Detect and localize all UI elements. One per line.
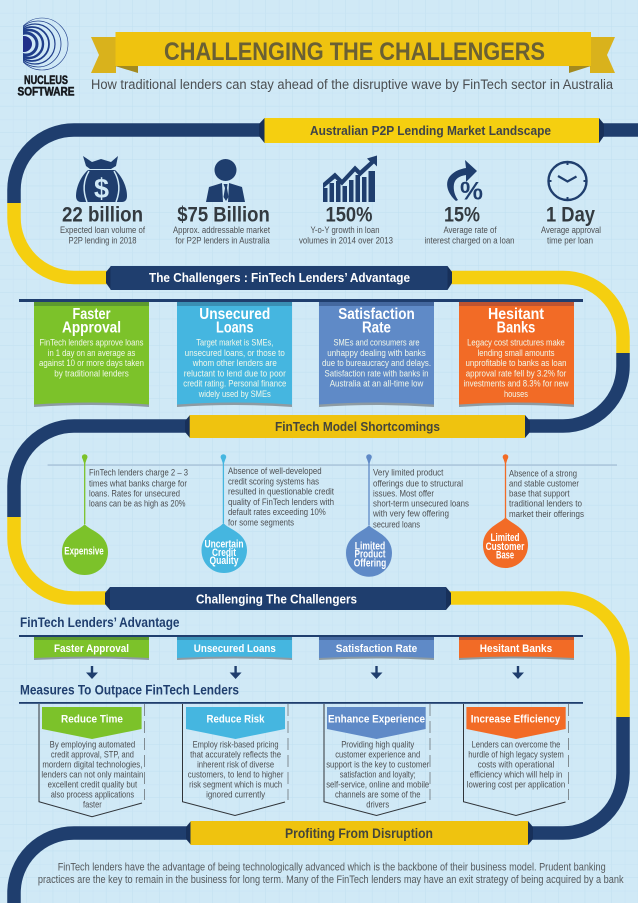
shortcoming: Limited Product Offering: Product bbox=[354, 548, 386, 560]
panel: Satisfaction Rate: unhappy dealing with banks bbox=[327, 348, 426, 358]
shortcoming: Uncertain Credit Quality: for some segments bbox=[228, 517, 294, 527]
measure: Reduce Time bbox=[39, 704, 144, 817]
shortcoming: Uncertain Credit Quality: Absence of well-developed bbox=[228, 466, 322, 476]
shortcoming: Limited Product Offering: short-term unsecured loans bbox=[373, 498, 469, 508]
shortcoming: Limited Product Offering: issues. Most offer bbox=[373, 488, 434, 498]
shortcoming: Limited Product Offering: Offering bbox=[354, 558, 386, 570]
panel: Satisfaction Rate: Australia at an all-time low bbox=[330, 379, 424, 389]
measure: Increase Efficiency: costs with operational bbox=[478, 759, 554, 769]
panel: Satisfaction Rate bbox=[319, 302, 434, 407]
panel: Faster Approval: by traditional lenders bbox=[54, 368, 129, 378]
shortcoming: Limited Customer Base: traditional lenders to bbox=[509, 498, 582, 508]
stat: 1 Day: time per loan bbox=[547, 235, 593, 245]
shortcoming: Expensive: times what banks charge for bbox=[89, 478, 187, 488]
icon: growth chart bbox=[323, 156, 377, 202]
shortcoming: Uncertain Credit Quality: Uncertain bbox=[204, 538, 244, 550]
tab: Faster Approval bbox=[34, 637, 149, 660]
shortcoming: Limited Product Offering: Very limited product bbox=[373, 467, 444, 477]
timeline rail bbox=[48, 464, 617, 466]
panel: Satisfaction Rate: Satisfaction bbox=[338, 306, 415, 323]
icon: clock bbox=[548, 162, 586, 200]
stat: 15% bbox=[424, 160, 514, 245]
measure: Reduce Risk: ignored currently bbox=[206, 789, 266, 799]
icon: business person bbox=[206, 159, 245, 202]
measure: Reduce Time: By employing automated bbox=[50, 739, 135, 749]
measure: Reduce Risk: customers, to lend to higher bbox=[188, 769, 283, 779]
shortcoming: Expensive bbox=[62, 454, 188, 575]
section bar: Challenging The Challengers: Challenging The Challengers bbox=[196, 592, 357, 606]
logo: Nucleus Software bbox=[15, 18, 74, 98]
measure: Enhance Experience: Enhance Experience bbox=[328, 714, 425, 726]
panel: Unsecured Loans: reluctant to lend due to poor bbox=[184, 368, 286, 378]
panel: Hesitant Banks bbox=[459, 302, 574, 407]
stat: $75 Billion: for P2P lenders in Australia bbox=[175, 235, 270, 245]
panel: Hesitant Banks: houses bbox=[504, 389, 528, 399]
panel rail bbox=[19, 299, 583, 302]
arrow 4 bbox=[512, 666, 524, 679]
stat: 15%: 15% bbox=[444, 204, 480, 226]
measure: Enhance Experience: support is the key to customer bbox=[326, 759, 429, 769]
measure: Increase Efficiency: Lenders can overcome the bbox=[472, 739, 560, 749]
measure: Reduce Risk bbox=[182, 704, 288, 816]
panel: Hesitant Banks: Legacy cost structures make bbox=[467, 338, 565, 348]
measure: Reduce Risk: inherent risk of diverse bbox=[197, 759, 274, 769]
heading: Measures To Outpace FinTech Lenders: Measures To Outpace FinTech Lenders bbox=[20, 682, 239, 698]
arrow 3 bbox=[370, 666, 382, 679]
panel: Faster Approval: Faster bbox=[72, 306, 110, 323]
stat: $75 Billion: Approx. addressable market bbox=[173, 225, 270, 235]
measures rail bbox=[19, 702, 583, 704]
shortcoming: Limited Customer Base: base that support bbox=[509, 488, 570, 498]
shortcoming: Expensive: loans can be as high as 20% bbox=[89, 498, 186, 508]
subtitle: How traditional lenders can stay ahead of the disruptive wave by FinTech sector in Australia bbox=[91, 77, 613, 92]
shortcoming: Uncertain Credit Quality: credit scoring systems has bbox=[228, 476, 319, 486]
measure: Reduce Time: credit approval, STP, and bbox=[51, 749, 134, 759]
measure: Increase Efficiency bbox=[464, 704, 569, 816]
tab: Unsecured Loans: Unsecured Loans bbox=[194, 643, 276, 655]
shortcoming: Limited Product Offering: Limited bbox=[355, 540, 385, 552]
tab: Satisfaction Rate bbox=[319, 637, 434, 660]
shortcoming: Expensive: FinTech lenders charge 2 – 3 bbox=[89, 467, 188, 477]
stat: 150%: volumes in 2014 over 2013 bbox=[299, 235, 393, 245]
measure: Reduce Risk: Reduce Risk bbox=[206, 714, 265, 726]
panel: Hesitant Banks: unprofitable to banks as loan bbox=[466, 358, 566, 368]
stat: 150%: 150% bbox=[326, 204, 373, 226]
closing text bbox=[38, 862, 624, 886]
tab: Hesitant Banks: Hesitant Banks bbox=[480, 643, 552, 655]
logo: Nucleus Software: SOFTWARE bbox=[18, 84, 74, 98]
measure: Reduce Time: faster bbox=[83, 799, 102, 809]
panel: Unsecured Loans: widely used by SMEs bbox=[198, 389, 271, 399]
shortcoming: Uncertain Credit Quality bbox=[202, 454, 334, 573]
shortcoming: Limited Customer Base: Limited bbox=[490, 532, 520, 544]
measure: Reduce Risk: Employ risk-based pricing bbox=[193, 739, 279, 749]
stat: 15%: interest charged on a loan bbox=[424, 235, 514, 245]
measure: Reduce Time: Reduce Time bbox=[61, 714, 123, 726]
measure: Reduce Time: lenders can not only maintain bbox=[41, 769, 143, 779]
panel: Satisfaction Rate: SMEs and consumers are bbox=[334, 338, 420, 348]
panel: Faster Approval bbox=[34, 302, 149, 407]
shortcoming: Uncertain Credit Quality: default rates exceeding 10% bbox=[228, 507, 326, 517]
icon: money bag: $ bbox=[94, 173, 109, 204]
logo: Nucleus Software: NUCLEUS bbox=[24, 73, 68, 87]
measure: Reduce Risk: risk segment which is much bbox=[189, 779, 282, 789]
measure: Reduce Time: also process applications bbox=[51, 789, 135, 799]
panel: Unsecured Loans: unsecured loans, or those to bbox=[185, 348, 285, 358]
measure: Enhance Experience: self-service, online and mobile bbox=[326, 779, 429, 789]
section bar: The Challengers bbox=[106, 266, 452, 290]
tab: Faster Approval: Faster Approval bbox=[54, 643, 129, 655]
measure: Enhance Experience: Providing high quality bbox=[341, 739, 415, 749]
arrow 2 bbox=[230, 666, 242, 679]
shortcoming: Limited Product Offering: with very few offering bbox=[372, 509, 449, 519]
tab rail bbox=[19, 635, 583, 637]
tab: Satisfaction Rate: Satisfaction Rate bbox=[336, 643, 417, 655]
tab: Hesitant Banks bbox=[459, 637, 574, 660]
icon: rising percent arrow: % bbox=[460, 178, 483, 206]
panel: Unsecured Loans: whom other lenders are bbox=[192, 358, 277, 368]
measure: Increase Efficiency: hurdle of high legacy system bbox=[468, 749, 564, 759]
shortcoming: Limited Product Offering: secured loans bbox=[373, 519, 420, 529]
shortcoming: Expensive: Expensive bbox=[64, 546, 104, 558]
section bar: Profiting From Disruption: Profiting From Disruption bbox=[285, 825, 433, 841]
shortcoming: Uncertain Credit Quality: Credit bbox=[212, 547, 236, 559]
section bar: The Challengers: The Challengers : FinTech Lenders’ Advantage bbox=[149, 270, 410, 285]
title banner: CHALLENGING THE CHALLENGERS bbox=[164, 38, 545, 66]
section bar: Profiting From Disruption bbox=[186, 821, 533, 845]
stat: 1 Day bbox=[541, 162, 601, 245]
section bar: FinTech Model Shortcomings: FinTech Model Shortcomings bbox=[275, 419, 440, 434]
stat: $75 Billion: $75 Billion bbox=[177, 204, 270, 226]
section bar: Australian P2P Lending Market Landscape: Australian P2P Lending Market Landscape bbox=[310, 123, 551, 138]
panel: Satisfaction Rate: Rate bbox=[362, 320, 391, 336]
tab: Unsecured Loans bbox=[177, 637, 292, 660]
panel: Hesitant Banks: lending small amounts bbox=[478, 348, 555, 358]
stat: 15%: Average rate of bbox=[444, 225, 497, 235]
stat: 22 billion: P2P lending in 2018 bbox=[68, 235, 136, 245]
shortcoming: Uncertain Credit Quality: quality of FinTech lenders with bbox=[228, 497, 334, 507]
shortcoming: Uncertain Credit Quality: Quality bbox=[210, 555, 239, 567]
panel: Faster Approval: FinTech lenders approve loans bbox=[40, 338, 144, 348]
panel: Satisfaction Rate: Satisfaction rate with banks in bbox=[324, 368, 428, 378]
panel: Unsecured Loans: Unsecured bbox=[199, 306, 270, 323]
shortcoming: Uncertain Credit Quality: resulted in questionable credit bbox=[228, 486, 334, 496]
arrow 1 bbox=[86, 666, 98, 679]
shortcoming: Limited Customer Base: Absence of a strong bbox=[509, 468, 577, 478]
stat: 150%: Y-o-Y growth in loan bbox=[310, 225, 380, 235]
shortcoming: Limited Customer Base: Base bbox=[496, 550, 514, 562]
shortcoming: Limited Customer Base: and stable customer bbox=[509, 478, 579, 488]
measure: Increase Efficiency: Increase Efficiency bbox=[471, 714, 561, 726]
stat: 1 Day: Average approval bbox=[541, 225, 601, 235]
heading: FinTech Lenders' Advantage: FinTech Lenders’ Advantage bbox=[20, 615, 180, 630]
panel: Hesitant Banks: approval rate fell by 3.2% for bbox=[466, 368, 566, 378]
section bar: FinTech Model Shortcomings bbox=[185, 415, 530, 438]
stat: 150% bbox=[299, 156, 393, 245]
shortcoming: Limited Customer Base: market their offerings bbox=[509, 509, 584, 519]
measure: Reduce Risk: that accurately reflects the bbox=[190, 749, 281, 759]
stat: $75 Billion bbox=[173, 159, 270, 245]
panel: Hesitant Banks: investments and 8.3% for new bbox=[464, 379, 569, 389]
panel: Unsecured Loans: Target market is SMEs, bbox=[196, 338, 273, 348]
stat: 22 billion: Expected loan volume of bbox=[60, 225, 145, 235]
panel: Unsecured Loans: Loans bbox=[216, 320, 254, 336]
section bar: Australian P2P Lending Market Landscape bbox=[259, 118, 604, 143]
panel: Satisfaction Rate: due to bureaucracy and delays. bbox=[322, 358, 431, 368]
stat: 1 Day: 1 Day bbox=[546, 204, 595, 226]
measure: Increase Efficiency: efficiency which will help in bbox=[470, 769, 562, 779]
panel: Faster Approval: against 10 or more days taken bbox=[39, 358, 144, 368]
measure: Reduce Time: mordern digital technologies, bbox=[42, 759, 142, 769]
shortcoming: Limited Customer Base: Customer bbox=[486, 541, 525, 553]
measure: Enhance Experience: customer experience and bbox=[335, 749, 420, 759]
panel: Faster Approval: Approval bbox=[62, 320, 121, 336]
measure: Enhance Experience: satisfaction and loyalty; bbox=[340, 769, 416, 779]
measure: Enhance Experience: channels are some of the bbox=[335, 789, 420, 799]
section bar: Challenging The Challengers bbox=[105, 587, 451, 610]
shortcoming: Expensive: loans. Rates for unsecured bbox=[89, 488, 180, 498]
shortcoming: Limited Product Offering bbox=[346, 454, 469, 577]
measure: Enhance Experience bbox=[324, 704, 430, 816]
measure: Enhance Experience: drivers bbox=[366, 799, 390, 809]
panel: Hesitant Banks: Banks bbox=[497, 320, 535, 336]
panel: Faster Approval: in 1 day on an average as bbox=[48, 348, 136, 358]
stat: 22 billion bbox=[60, 156, 145, 245]
measure: Reduce Time: excellent credit quality but bbox=[48, 779, 138, 789]
panel: Hesitant Banks: Hesitant bbox=[488, 306, 545, 323]
shortcoming: Limited Product Offering: offerings due to structural bbox=[373, 478, 463, 488]
shortcoming: Limited Customer Base bbox=[483, 454, 584, 568]
panel: Unsecured Loans: credit rating. Personal finance bbox=[183, 379, 286, 389]
title banner bbox=[91, 32, 615, 73]
stat: 22 billion: 22 billion bbox=[62, 204, 143, 226]
panel: Unsecured Loans bbox=[177, 302, 292, 407]
measure: Increase Efficiency: lowering cost per application bbox=[467, 779, 565, 789]
